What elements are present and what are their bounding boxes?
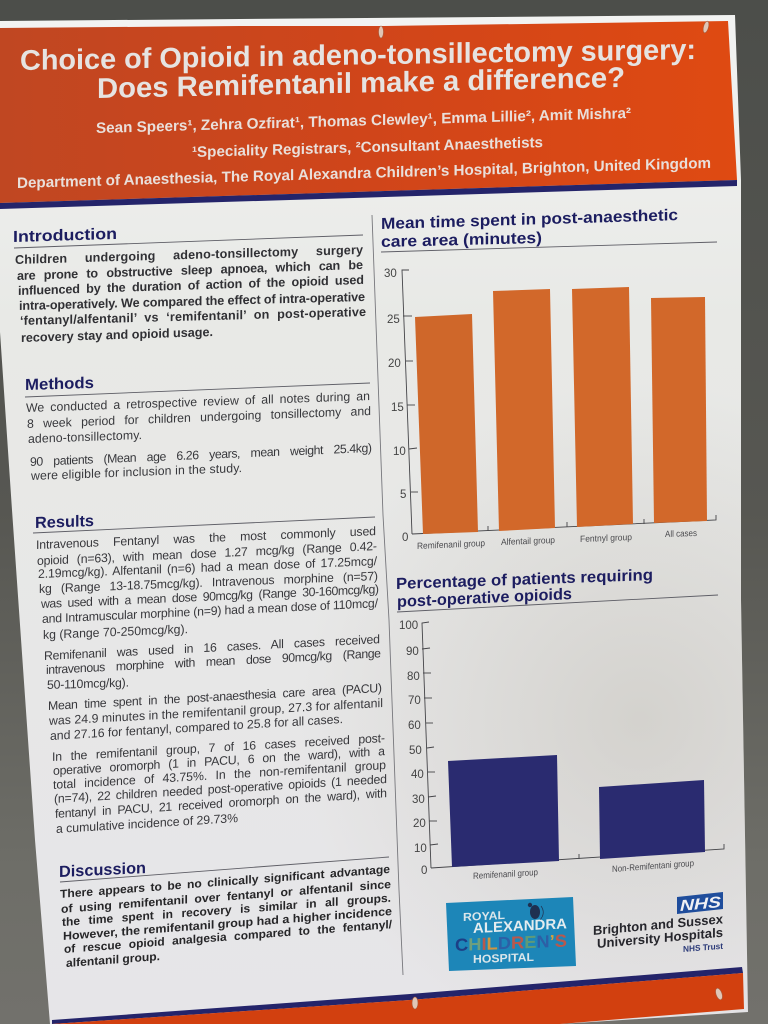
logo: NHS Brighton and Sussex: Brighton and Sussex (593, 911, 724, 938)
chart heading: Mean time spent in post-anaesthetic (381, 207, 678, 233)
text: discussion body: There appears to be no clinically significant advantage (60, 863, 391, 901)
text: results body: was used with a mean dose 90mcg/kg (Range 30-160mcg/kg) (40, 582, 379, 611)
y axis: 30 (412, 794, 425, 806)
text: results body: and 27.16 for fentanyl, compared to 25.8 for all cases. (50, 712, 343, 743)
panel: results (33, 513, 387, 836)
text: results body: operative oromorph (1 in PACU, 6 on the ward), with a (53, 744, 385, 778)
text: results body: was 24.9 minutes in the remifentanil group, 27.3 for alfentanil (48, 696, 383, 728)
text: results body: a cumulative incidence of 29.73% (56, 811, 238, 836)
text: methods body: adeno-tonsillectomy. (28, 428, 142, 446)
logo: Royal Alexandra Children's Hospital: ALEXANDRA (473, 916, 568, 937)
text: discussion body (60, 863, 393, 970)
chart heading: Percentage of patients requiring (396, 567, 653, 593)
category labels (473, 858, 694, 881)
text: results body: intravenous morphine with mean dose 90mcg/kg (Range (46, 646, 381, 677)
text: discussion body: alfentanil group. (66, 950, 160, 970)
y axis: 10 (414, 843, 427, 855)
category labels: Non-Remifentani group (612, 858, 694, 874)
text: introduction body: ‘fentanyl/alfentanil’ vs ‘remifentanil’ on post-operative (20, 305, 366, 328)
chart: mean time in post-anaesthetic care area (381, 207, 717, 551)
text: results body: kg (Range 70-250mcg/kg). (43, 622, 188, 642)
text: results body: fentanyl in PACU, 21 received oromorph on the ward), with (55, 786, 387, 821)
category labels: All cases (665, 528, 697, 539)
text: discussion body: the time spent in recovery is similar in all groups. (62, 892, 391, 929)
chart: percentage requiring post-operative opioids (396, 567, 724, 881)
y axis: 20 (388, 358, 401, 370)
y axis: 70 (408, 695, 421, 707)
logo: NHS Brighton and Sussex: NHS Trust (683, 941, 723, 954)
text: results body: Mean time spent in the post-anaesthesia care area (PACU) (48, 681, 382, 713)
panel: introduction (13, 226, 366, 345)
bar: alfentanil group (493, 289, 555, 531)
y axis: 15 (391, 402, 404, 414)
y axis: 60 (408, 720, 421, 732)
footer band (52, 967, 744, 1024)
text: results body: and Intramuscular morphine (n=9) had a mean dose of 110mcg/ (42, 596, 379, 626)
logo: NHS Brighton and Sussex: University Hospitals (597, 925, 723, 951)
category labels: Remifenanil group (417, 538, 485, 551)
pins (378, 21, 724, 1009)
heading: introduction: Introduction (13, 226, 117, 246)
text: introduction body: recovery stay and opioid usage. (21, 325, 213, 345)
y axis: 10 (393, 446, 406, 458)
bar: remifentanil group (415, 314, 478, 534)
y axis: 30 (384, 268, 397, 280)
text: introduction body: Children undergoing adeno-tonsillectomy surgery (15, 243, 363, 267)
icon: mouse silhouette (528, 903, 543, 920)
bar: fentanyl group (572, 287, 633, 527)
y axis: 0 (402, 532, 408, 544)
y axis: 20 (413, 818, 426, 830)
text: results body: In the remifentanil group, 7 of 16 cases received post- (52, 731, 385, 764)
category labels: Remifenanil group (473, 867, 538, 881)
text: discussion body: However, the remifentanil group had a higher incidence (63, 905, 393, 943)
logo: Royal Alexandra Children's Hospital: CHILDREN’S (455, 931, 567, 955)
y axis: 5 (400, 489, 406, 501)
panel: methods (25, 375, 372, 483)
text: results body: total incidence of 43.75%. In the non-remifentanil group (53, 758, 386, 792)
text: methods body: were eligible for inclusion in the study. (30, 461, 242, 483)
panel: discussion (59, 857, 393, 970)
logo: NHS Brighton and Sussex: NHS (680, 894, 722, 915)
bar: remifentanil group (448, 755, 559, 867)
text: results body: (n=74), 22 children needed post-operative opioids (1 needed (54, 772, 387, 806)
text: introduction body (15, 243, 366, 345)
text: methods body: 90 patients (Mean age 6.26 years, mean weight 25.4kg) (30, 441, 372, 469)
text: results body: kg (Range 13-18.75mcg/kg). Intravenous morphine (n=57) (39, 569, 378, 596)
y axis: 100 (399, 620, 418, 632)
y axis (384, 268, 418, 544)
text: results body: 50-110mcg/kg). (47, 676, 129, 692)
title: Choice of Opioid in adeno-tonsillectomy surgery: (20, 34, 696, 77)
category labels: Alfentail group (501, 535, 555, 547)
title: Does Remifentanil make a difference? (97, 62, 625, 105)
text: methods body (26, 389, 372, 483)
bar: all cases (651, 297, 707, 523)
text: introduction body: influenced by the duration of action of the opioid used (18, 273, 364, 298)
y axis: 0 (421, 865, 427, 877)
chart heading: care area (minutes) (381, 230, 542, 251)
chart heading: post-operative opioids (397, 586, 572, 611)
logo: NHS Brighton and Sussex (593, 892, 724, 954)
y axis: 40 (411, 769, 424, 781)
text: discussion body: of rescue opioid analgesia compared to the fentanyl/ (64, 918, 393, 956)
text: methods body: We conducted a retrospective review of all notes during an (26, 389, 370, 415)
text: results body (36, 524, 387, 836)
y axis: 25 (387, 314, 400, 326)
text: methods body: 8 week period for children undergoing tonsillectomy and (27, 404, 371, 431)
bar: non-remifentanil group (599, 780, 705, 859)
chart heading (381, 207, 678, 251)
heading: methods: Methods (25, 375, 94, 394)
y axis: 90 (406, 646, 419, 658)
text: discussion body: of using remifentanil over fentanyl or alfentanil since (61, 878, 392, 916)
chart heading (396, 567, 653, 611)
text: results body: 2.19mcg/kg). Alfentanil (n=6) had a mean dose of 17.25mcg/ (38, 554, 378, 581)
text: results body: opioid (n=63), with mean dose 1.27 mcg/kg (Range 0.42- (37, 539, 377, 568)
department: Department of Anaesthesia, The Royal Alexandra Children’s Hospital, Brighton, United Kingdom (17, 155, 711, 192)
header banner (0, 21, 737, 209)
category labels (417, 528, 697, 551)
logo: Royal Alexandra Children's Hospital: ROYAL (463, 910, 505, 924)
text: results body: Remifenanil was used in 16 cases. All cases received (44, 632, 380, 663)
y axis: 80 (407, 671, 420, 683)
category labels: Fentnyl group (580, 532, 632, 544)
text: introduction body: intra-operatively. We compared the effect of intra-operative (19, 290, 365, 313)
heading: discussion: Discussion (59, 860, 146, 881)
text: results body: Intravenous Fentanyl was the most commonly used (36, 524, 376, 552)
y axis (399, 620, 438, 877)
y axis: 50 (409, 745, 422, 757)
text: introduction body: are prone to obstructive sleep apnoea, which can be (17, 258, 363, 283)
affiliations: ¹Speciality Registrars, ²Consultant Anaesthetists (192, 134, 543, 161)
authors: Sean Speers¹, Zehra Ozfirat¹, Thomas Clewley¹, Emma Lillie², Amit Mishra² (96, 105, 631, 137)
heading: results: Results (35, 513, 94, 532)
title (20, 34, 696, 105)
logo: Royal Alexandra Children's Hospital: HOSPITAL (473, 952, 534, 966)
logo: Royal Alexandra Children's Hospital (446, 897, 576, 971)
